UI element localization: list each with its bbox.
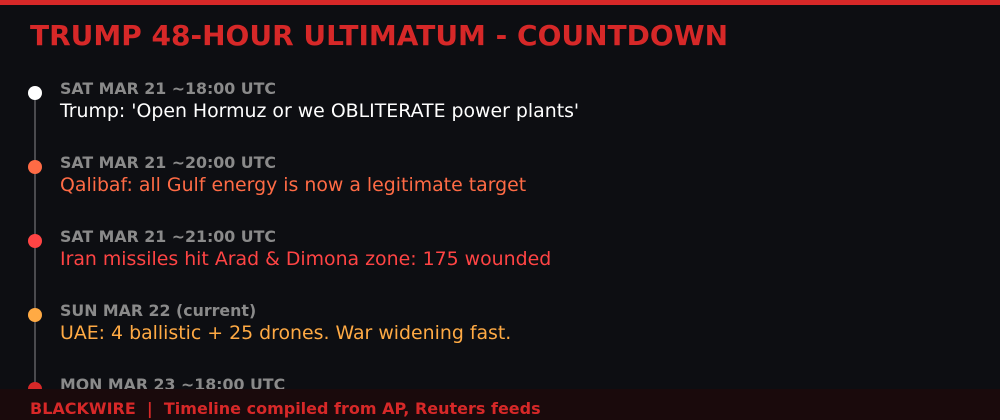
timeline line — [34, 93, 36, 393]
event 1 — [28, 79, 579, 122]
footer — [0, 389, 1000, 420]
event 1: Trump: 'Open Hormuz or we OBLITERATE power plants' — [60, 100, 579, 122]
event 3: SAT MAR 21 ~21:00 UTC — [60, 227, 276, 246]
event 3 — [28, 227, 551, 270]
event 1: SAT MAR 21 ~18:00 UTC — [60, 79, 276, 98]
event 2: Qalibaf: all Gulf energy is now a legitimate target — [60, 174, 526, 196]
event 4: UAE: 4 ballistic + 25 drones. War widening fast. — [60, 322, 511, 344]
footer: BLACKWIRE | Timeline compiled from AP, Reuters feeds — [30, 399, 541, 418]
event 2: SAT MAR 21 ~20:00 UTC — [60, 153, 276, 172]
event 3: Iran missiles hit Arad & Dimona zone: 175 wounded — [60, 248, 551, 270]
event 4 — [28, 301, 511, 344]
title: TRUMP 48-HOUR ULTIMATUM - COUNTDOWN — [30, 19, 728, 52]
event 5: MON MAR 23 ~18:00 UTC — [60, 375, 285, 394]
event 2 — [28, 153, 526, 196]
event 4: SUN MAR 22 (current) — [60, 301, 256, 320]
